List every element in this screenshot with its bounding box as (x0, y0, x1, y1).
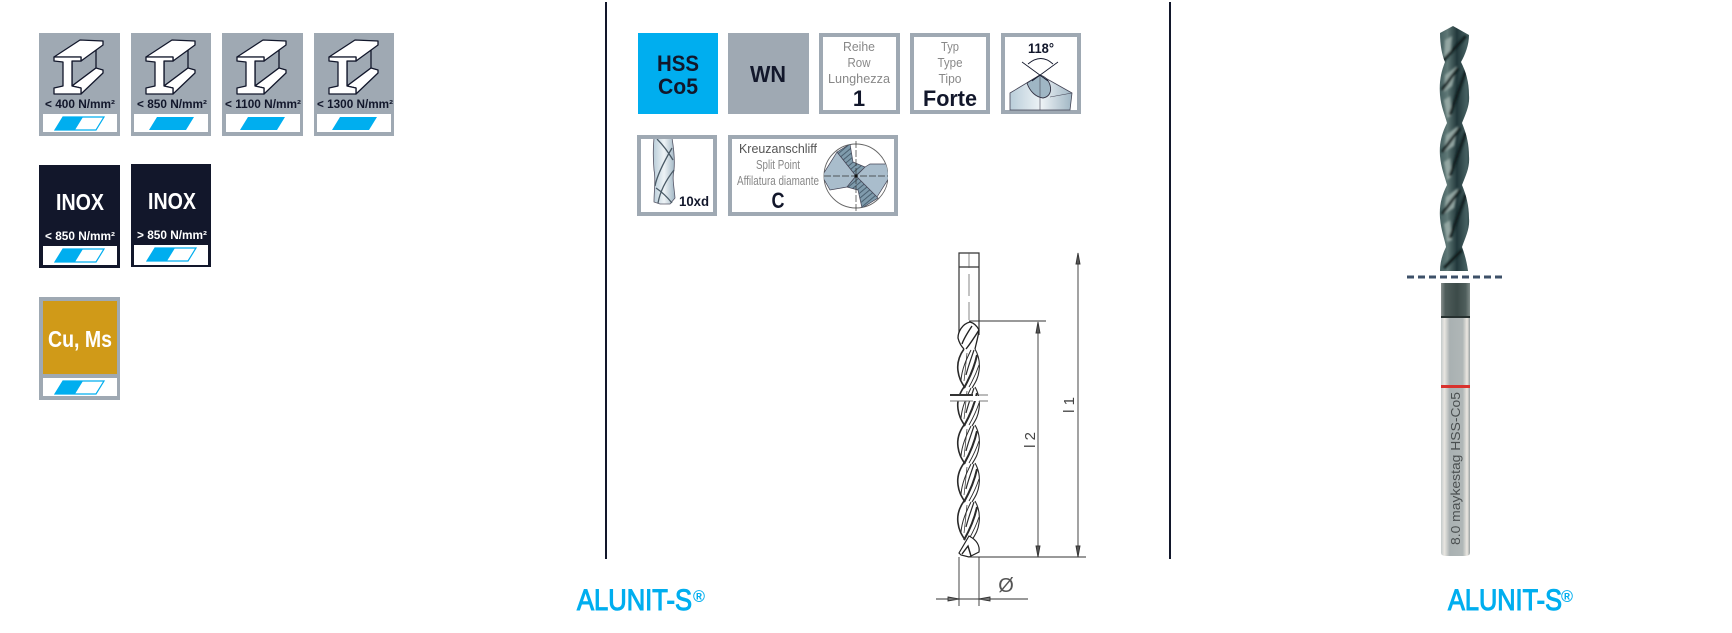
flutes (958, 322, 979, 557)
badge: HSS Co5: HSS (657, 51, 699, 76)
badge: HSS Co5: Co5 (658, 74, 698, 99)
section break (1407, 276, 1502, 278)
divider: right (1169, 2, 1171, 559)
technical drawing of the drill (936, 253, 1086, 606)
drill photo (1407, 24, 1502, 556)
product title right: ® (1561, 587, 1573, 606)
material icon: INOX under 850 (39, 165, 120, 268)
material icon: steel under 1300 (314, 33, 394, 136)
badge: type Forte (912, 35, 988, 112)
badge: split point C (730, 137, 896, 214)
fluted section (1440, 26, 1470, 271)
L1 dimension (969, 253, 1086, 557)
badge: WN: WN (750, 61, 786, 87)
dark shank section (1441, 283, 1470, 318)
red ring (1441, 385, 1470, 388)
badge: row 1: Reihe (843, 39, 875, 54)
badge: row 1: 1 (853, 86, 865, 111)
badge: 10xd flute length (639, 137, 715, 214)
badge: HSS Co5 (638, 33, 718, 114)
bright shank section (1441, 318, 1470, 556)
L2 label: l 2 (1022, 432, 1039, 448)
material icon: INOX over 850: INOX (148, 188, 196, 214)
material icon: steel under 1100: < 1100 N/mm² (225, 99, 301, 111)
material icon: INOX over 850 (131, 164, 211, 267)
material icon: steel under 850: < 850 N/mm² (137, 99, 207, 111)
material icon: copper and brass: Cu, Ms (48, 326, 112, 352)
badge: row 1: Row (848, 55, 871, 70)
material icon: steel under 400: < 400 N/mm² (45, 99, 115, 111)
product title right: ALUNIT-S (1448, 584, 1562, 617)
material icon: INOX under 850: INOX (56, 189, 104, 215)
badge: type Forte: Type (938, 55, 962, 70)
material icon: steel under 1100 (222, 33, 303, 136)
material icon: INOX under 850: < 850 N/mm² (45, 231, 115, 243)
material icon: steel under 850 (131, 33, 211, 136)
badge: row 1 (821, 35, 898, 112)
drill shank outline (959, 253, 979, 337)
badge: 118 degree point angle: 118° (1028, 40, 1054, 56)
shank engraving: 8.0 maykestag HSS-Co5 (1448, 392, 1463, 545)
material icon: copper and brass (39, 297, 120, 400)
L1 label: l 1 (1061, 397, 1078, 413)
split point diagram (822, 141, 889, 212)
badge: split point C: C (772, 188, 785, 213)
material icon: INOX over 850: > 850 N/mm² (137, 230, 207, 242)
center line (968, 253, 970, 320)
divider: left (605, 2, 607, 559)
badge: WN (728, 33, 809, 114)
badge: split point C: Split Point (756, 157, 800, 172)
badge: split point C: Affilatura diamante (737, 173, 819, 188)
badge: type Forte: Typ (941, 39, 959, 54)
badge: type Forte: Forte (923, 86, 977, 111)
product title left: ALUNIT-S (577, 584, 692, 617)
L2 dimension (969, 321, 1046, 557)
material icon: steel under 1300: < 1300 N/mm² (317, 99, 393, 111)
break marks (955, 396, 983, 401)
badge: 10xd flute length: 10xd (679, 193, 709, 209)
badge: type Forte: Tipo (938, 71, 962, 86)
material icon: steel under 400 (39, 33, 120, 136)
badge: 118 degree point angle (1003, 35, 1079, 112)
badge: row 1: Lunghezza (828, 71, 891, 86)
diameter dimension (936, 557, 1028, 606)
badge: split point C: Kreuzanschliff (739, 141, 817, 156)
product title left: ® (693, 587, 705, 606)
diameter label: Ø (998, 575, 1014, 597)
